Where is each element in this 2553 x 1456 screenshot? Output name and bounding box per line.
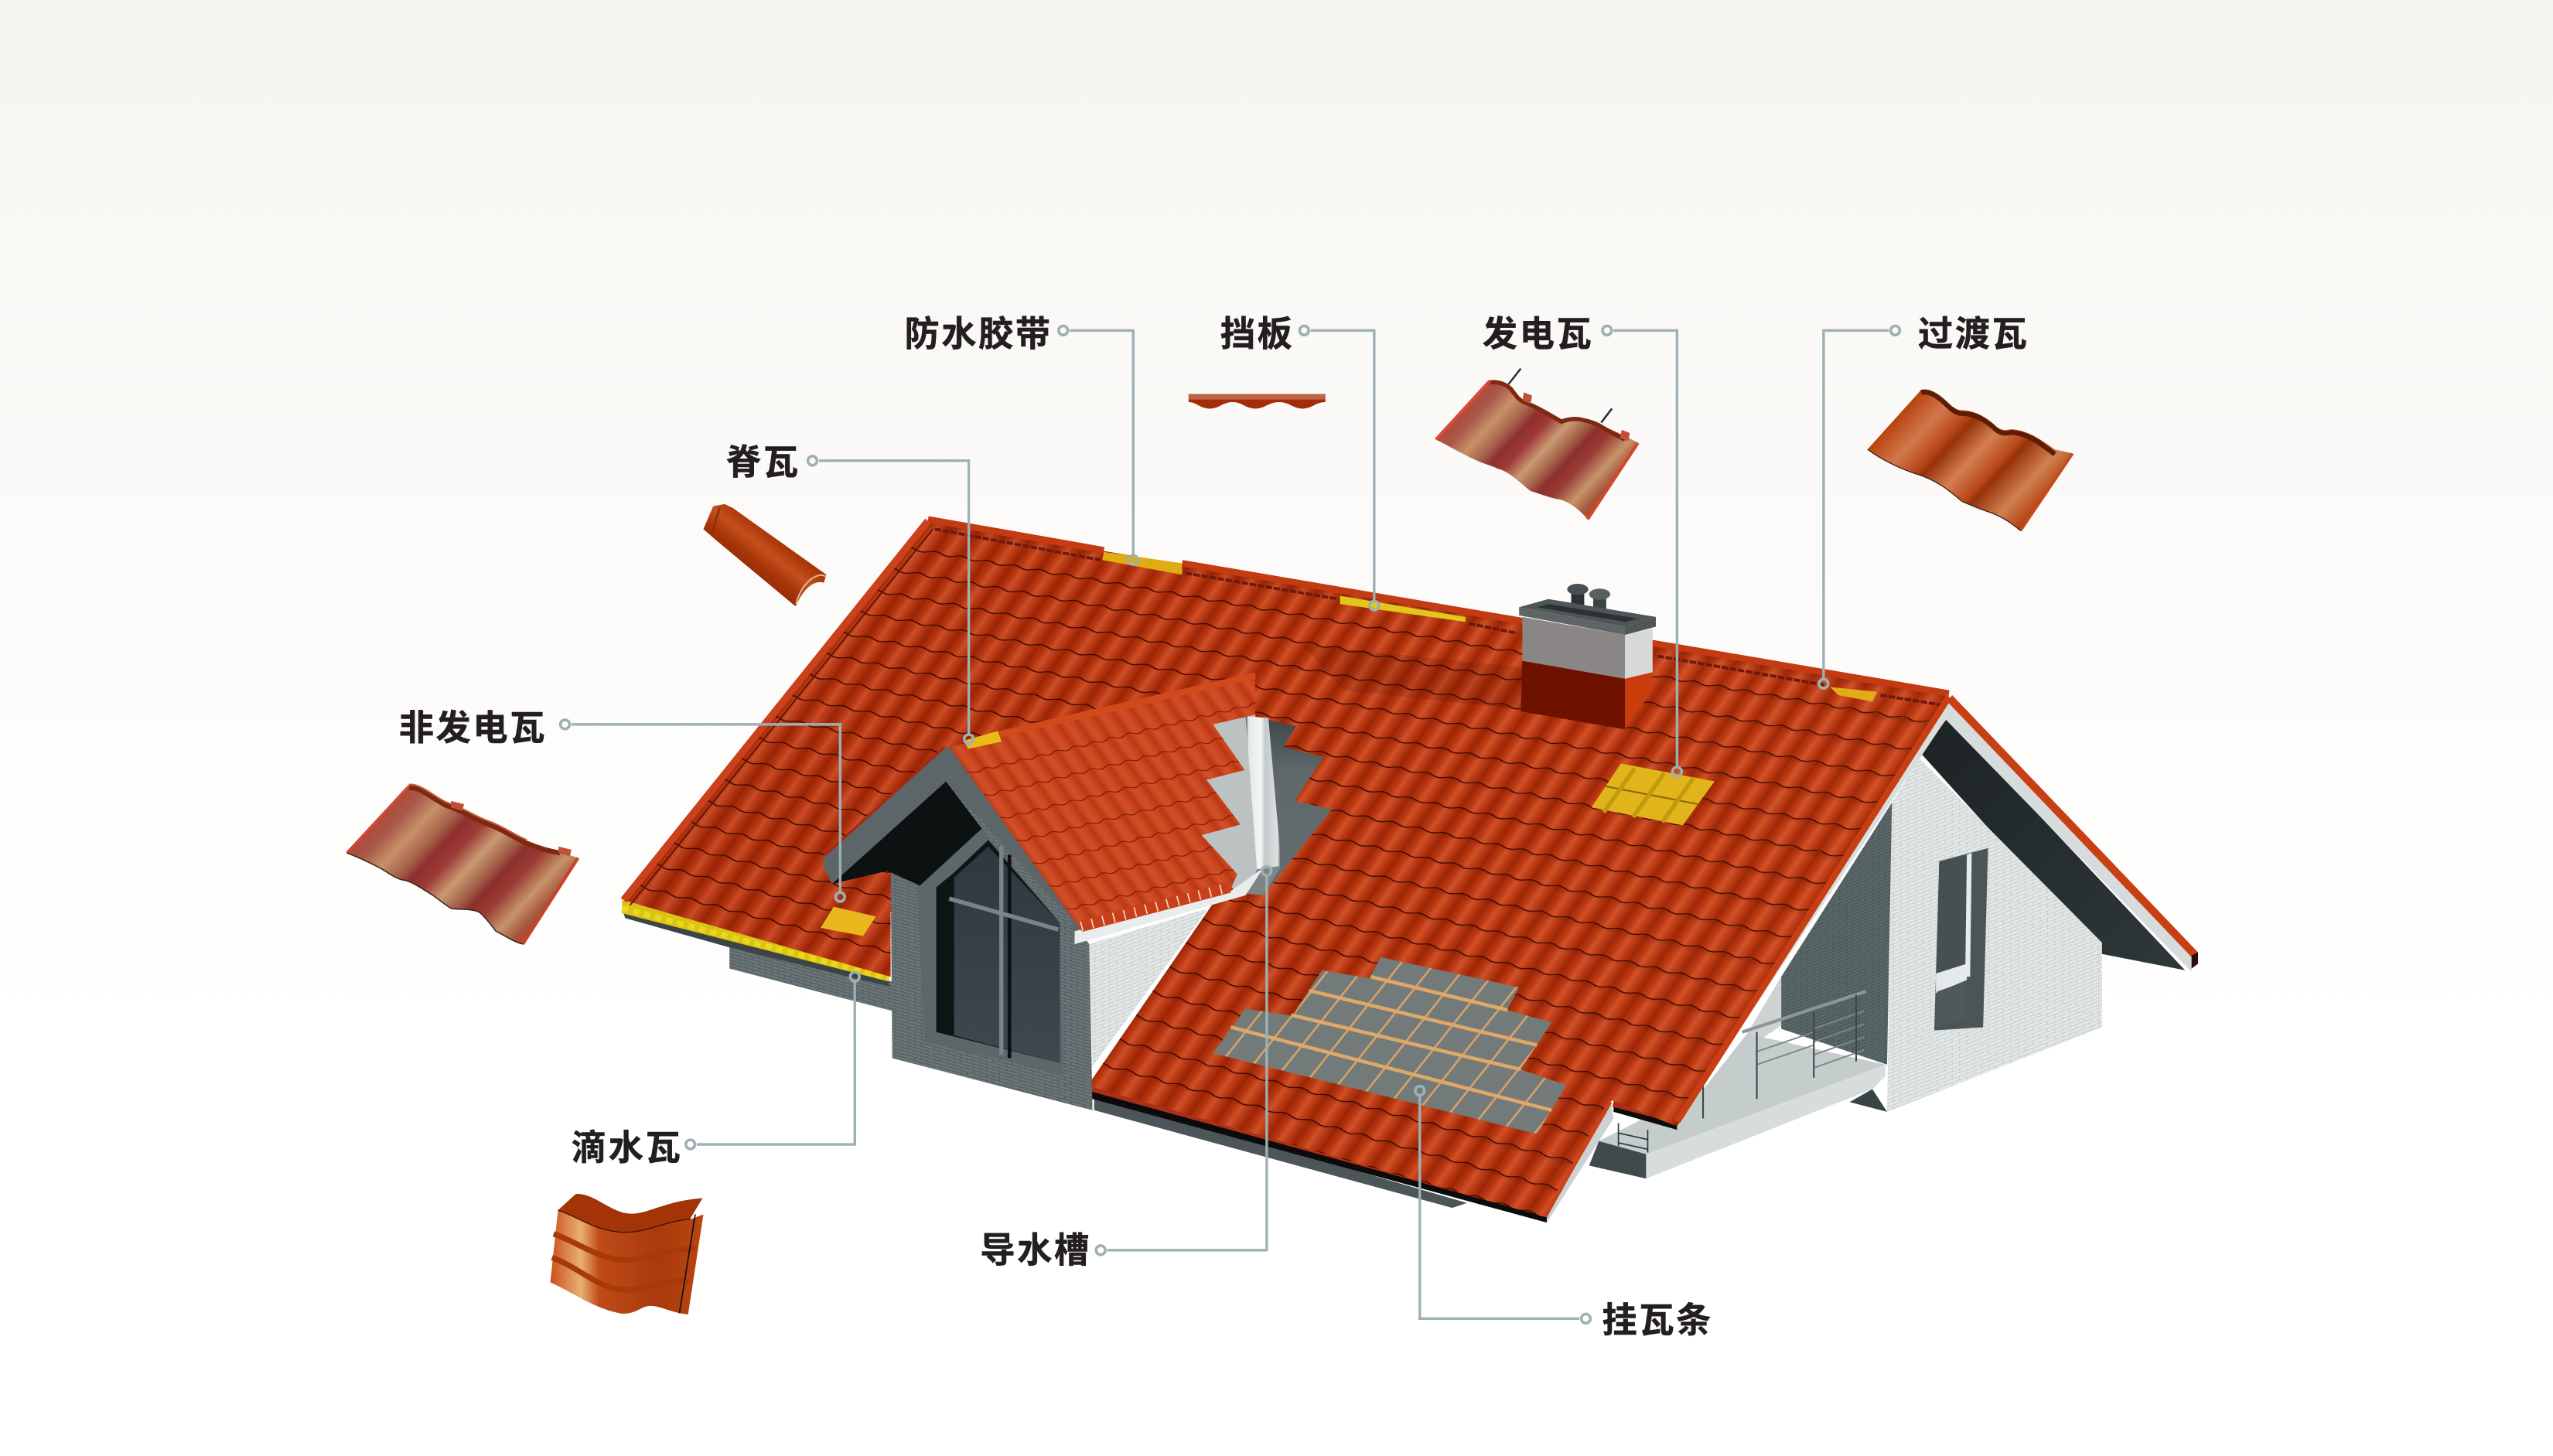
start dot	[561, 720, 569, 729]
leader line	[1613, 330, 1677, 767]
callout: 滴水瓦	[572, 972, 859, 1168]
label: 非发电瓦	[399, 708, 547, 748]
grey underlay	[1247, 720, 1332, 895]
main roof tiles	[627, 523, 1949, 1217]
black gutter shadow	[1086, 1081, 1547, 1222]
callout: 发电瓦	[1483, 314, 1681, 776]
white eave	[1074, 868, 1264, 944]
red lower side	[1625, 673, 1653, 729]
start dot	[1059, 326, 1068, 335]
yellow power tile patch	[1592, 763, 1715, 825]
label: 导水槽	[980, 1231, 1091, 1270]
batten cutout: 挂瓦条	[1213, 957, 1566, 1134]
valley flashing 导水槽	[1246, 716, 1282, 869]
dormer eave drip	[1081, 887, 1229, 926]
house: gable end and balcony	[1589, 718, 2185, 1178]
upper eave black	[1613, 1099, 1677, 1130]
callout: 过渡瓦	[1819, 314, 2029, 688]
end dot	[1370, 601, 1379, 610]
end dot	[964, 735, 974, 744]
wires	[1508, 369, 1612, 423]
yellow drip strip	[622, 900, 889, 981]
eave drip scallops	[1086, 1084, 1547, 1211]
white side wall	[1089, 909, 1208, 1066]
callout: 挡板	[1220, 314, 1379, 610]
red edge	[824, 747, 944, 856]
underlay cutaway behind dormer	[1196, 714, 1332, 895]
right rake band	[1677, 697, 1949, 1122]
label: 脊瓦	[726, 443, 800, 482]
dormer roof tiles	[950, 674, 1256, 931]
leader line	[572, 725, 840, 892]
dark soffit	[622, 909, 889, 987]
callout: 脊瓦	[726, 443, 974, 744]
start dot	[1582, 1314, 1590, 1323]
label: 挡板	[1220, 314, 1294, 353]
product: 过渡瓦 transition tile	[1868, 390, 2073, 530]
front eave fascia	[1086, 1081, 1547, 1222]
start dot	[1299, 326, 1309, 335]
start dot	[1096, 1246, 1105, 1255]
gable soffit	[1921, 718, 2185, 970]
window frame	[916, 829, 1063, 1074]
rake edges of gable	[1677, 695, 2198, 1130]
end dot	[835, 892, 845, 902]
dormer ridge and drip	[964, 676, 1255, 926]
right side drip and wall under lower roof	[1547, 1099, 1677, 1222]
product: 脊瓦 ridge tile	[703, 504, 826, 605]
dormer yellow tape	[964, 731, 1002, 748]
horizontal battens	[1231, 977, 1551, 1110]
small white wall	[1732, 977, 1781, 1058]
dark soffit	[832, 782, 981, 885]
flashing tip	[1247, 866, 1282, 895]
brick upper side	[1625, 629, 1653, 679]
callout: 挂瓦条	[1415, 1086, 1713, 1340]
under-ridge shadow	[934, 529, 1940, 705]
yellow transition tile patch	[1830, 687, 1877, 701]
start dot	[686, 1140, 695, 1149]
product: 非发电瓦 non-power tile	[346, 785, 578, 944]
product: 滴水瓦 drip tile	[551, 1194, 703, 1314]
end dot	[1672, 767, 1681, 776]
leader line	[1420, 1096, 1579, 1318]
leader line	[1070, 330, 1133, 555]
vents	[1567, 584, 1610, 620]
start dot	[1891, 326, 1899, 335]
yellow baffle strip	[1340, 596, 1466, 622]
leader line	[1311, 330, 1374, 601]
grey underlay with cross battens	[1213, 957, 1566, 1134]
balcony railing	[1703, 991, 1866, 1118]
chimney	[1519, 584, 1656, 729]
grey fascia wall	[1094, 1094, 1467, 1208]
ridge band	[928, 520, 1949, 694]
end dot	[1819, 679, 1828, 688]
gable window	[1934, 848, 1988, 1031]
upper eave scallops	[1613, 1102, 1677, 1118]
grey brick wall	[891, 782, 1093, 1110]
label: 挂瓦条	[1602, 1301, 1713, 1340]
callout: 防水胶带	[904, 314, 1138, 564]
white edge of lower roof	[1547, 1099, 1613, 1222]
gable white wall	[1887, 759, 2102, 1112]
label: 过渡瓦	[1918, 314, 2029, 353]
right end cap	[2192, 953, 2198, 969]
label: 滴水瓦	[572, 1128, 682, 1168]
lower grey wall	[729, 944, 893, 1011]
balcony slab	[1589, 1034, 1887, 1178]
leader line	[1108, 876, 1267, 1250]
leader line	[819, 461, 969, 734]
pale wall	[1196, 714, 1267, 894]
start dot	[808, 456, 817, 465]
lower right rake band	[1548, 1102, 1610, 1209]
start dot	[1602, 326, 1612, 335]
label: 防水胶带	[904, 314, 1053, 353]
grey fascia chevron	[824, 747, 1087, 943]
white rake band	[1677, 700, 1949, 1130]
yellow waterproof tape	[1102, 552, 1182, 575]
end dot	[850, 972, 859, 981]
end dot	[1415, 1086, 1425, 1095]
right white barge board	[1946, 700, 2192, 972]
right red edge	[1947, 695, 2198, 960]
cap	[1519, 599, 1656, 627]
brick upper front	[1522, 617, 1625, 679]
leader line	[697, 981, 855, 1144]
tabs	[1522, 392, 1630, 442]
recessed grey wall	[1781, 803, 1892, 1065]
left rake band	[623, 521, 928, 900]
dormer wall	[891, 782, 1208, 1110]
small rail	[1619, 1124, 1647, 1153]
callout: 导水槽	[980, 866, 1271, 1270]
dormer ridge tiles	[1000, 676, 1255, 734]
red lower front	[1521, 661, 1625, 729]
end dot	[1262, 866, 1271, 875]
label: 发电瓦	[1483, 314, 1593, 353]
callout: 非发电瓦	[399, 708, 845, 902]
leader line	[1824, 330, 1889, 679]
yellow marker patches on roof	[821, 552, 1877, 936]
product: 发电瓦 power tile	[1436, 369, 1638, 520]
dormer gable fascia	[824, 747, 1264, 944]
ridge and left rake edge	[623, 520, 1949, 1209]
end dot	[1128, 555, 1138, 564]
mullions	[1000, 847, 1002, 1055]
product: 挡板 baffle	[1189, 394, 1326, 408]
yellow non-power tile patch	[821, 907, 876, 936]
left lower wall and yellow eave strip	[622, 900, 893, 1011]
tabs	[451, 801, 572, 856]
window glass	[937, 840, 1060, 1063]
